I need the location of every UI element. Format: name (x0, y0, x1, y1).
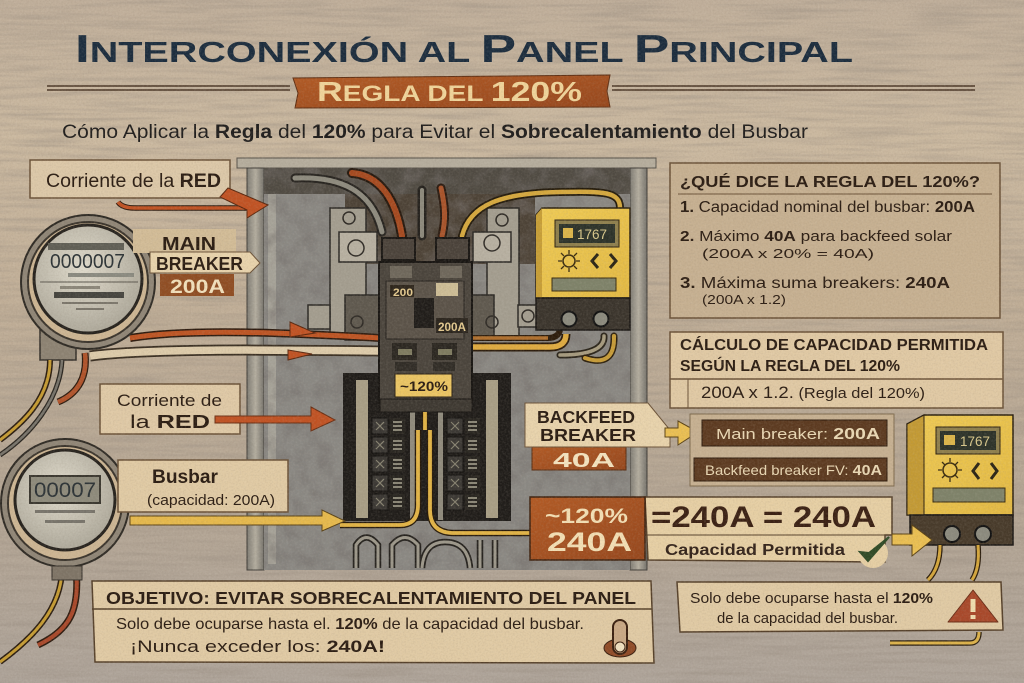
rule items: (200A x 1.2) (702, 293, 786, 307)
values: breakers: Main breaker: 200A (716, 426, 881, 443)
values: breakers: Backfeed breaker FV: 40A (705, 462, 882, 479)
values: breakers (690, 414, 894, 486)
arrow: to inverter (892, 525, 932, 556)
label: busbar: (capacidad: 200A) (147, 492, 275, 509)
arrow: busbar (130, 510, 345, 531)
icon: warning (948, 590, 998, 622)
panel: allowed capacity calculation (670, 332, 1003, 408)
label: corriente de la RED middle: Corriente de (117, 391, 222, 410)
note: busbar limit: Solo debe ocuparse hasta el 120% (690, 591, 933, 607)
subtitle banner: R EGLA DEL 120% (317, 76, 582, 107)
label: backfeed breaker: BREAKER (540, 425, 636, 445)
label: main breaker: MAIN (162, 234, 216, 254)
inverter: right (907, 415, 1013, 580)
main breaker: 200A (438, 320, 466, 334)
label: busbar: Busbar (152, 467, 219, 488)
meter wires: lower left (0, 566, 82, 662)
panel: allowed capacity calculation: SEGÚN LA REGLA DEL 120% (680, 357, 900, 375)
panel: allowed capacity calculation: CÁLCULO DE CAPACIDAD PERMITIDA (680, 337, 988, 354)
panel: objective (92, 581, 654, 663)
icon: thermometer (604, 620, 636, 657)
panel: electrical enclosure (237, 158, 656, 570)
label: main breaker: BREAKER (156, 254, 243, 274)
rule items (680, 199, 975, 307)
label: busbar (118, 460, 288, 512)
label: main breaker (133, 229, 260, 298)
note: busbar limit: de la capacidad del busbar. (717, 611, 898, 627)
title: INTERCONEXIÓN AL P ANEL P RINCIPAL (75, 28, 853, 71)
result: 240A box: 240A (547, 527, 632, 557)
label: corriente de la RED top (30, 160, 230, 198)
panel: objective: Solo debe ocuparse hasta el. 120% de la capacidad del busbar. (116, 616, 584, 633)
arrow: middle grid current (215, 407, 335, 431)
meter: main (21, 215, 155, 360)
wires: busbar yellow (340, 412, 532, 568)
label: corriente de la RED middle (100, 384, 240, 434)
panel: rule (670, 163, 1000, 318)
panel: allowed capacity calculation: 200A x 1.2. (Regla del 120%) (701, 383, 925, 402)
main breaker: 200 (393, 287, 413, 299)
label: corriente de la RED middle: la RED (130, 412, 210, 432)
meter: secondary: 00007 (34, 479, 96, 502)
label: corriente de la RED top: Corriente de la RED (46, 171, 221, 192)
meter: secondary (1, 439, 129, 567)
label: backfeed breaker (525, 403, 670, 472)
meter: main: 0000007 (50, 251, 125, 273)
inverter: right: 1767 (960, 433, 990, 449)
subtitle banner (47, 75, 975, 108)
rule items: 2. Máximo 40A para backfeed solar (680, 228, 952, 245)
result: 240A box (530, 497, 892, 568)
inverter: panel: 1767 (577, 226, 607, 242)
arrow: backfeed (665, 421, 698, 445)
panel: objective: ¡Nunca exceder los: 240A! (130, 638, 385, 656)
heading: ¿QUÉ DICE LA REGLA DEL 120%? (680, 172, 980, 191)
result: 240A box: ~120% (545, 505, 628, 528)
arrow heads: service feed (288, 322, 315, 360)
label: backfeed breaker: 40A (553, 450, 615, 472)
panel: breaker banks (343, 373, 511, 521)
result: 240A box: =240A = 240A (651, 501, 876, 534)
main breaker: ~120% (400, 378, 449, 394)
rule items: (200A x 20% = 40A) (702, 247, 874, 261)
label: ~120% (395, 374, 452, 397)
result: 240A box: Capacidad Permitida (665, 542, 845, 559)
icon: check (858, 537, 889, 568)
wires: service feed from meter (90, 330, 566, 356)
main breaker (379, 238, 472, 412)
inverter: panel (536, 208, 630, 330)
mounting brackets (308, 208, 538, 340)
label: main breaker: 200A (170, 277, 225, 298)
rule items: 1. Capacidad nominal del busbar: 200A (680, 199, 975, 216)
subheading: Cómo Aplicar la Regla del 120% para Evitar el Sobrecalentamiento del Busbar (62, 121, 809, 143)
rule items: 3. Máxima suma breakers: 240A (680, 275, 950, 292)
meter wires: left (0, 353, 85, 455)
note: busbar limit (677, 582, 1003, 643)
arrow: top grid current (118, 188, 268, 218)
label: backfeed breaker: BACKFEED (537, 407, 635, 427)
panel: objective: OBJETIVO: EVITAR SOBRECALENTAMIENTO DEL PANEL (106, 588, 636, 608)
top wires (295, 173, 620, 360)
